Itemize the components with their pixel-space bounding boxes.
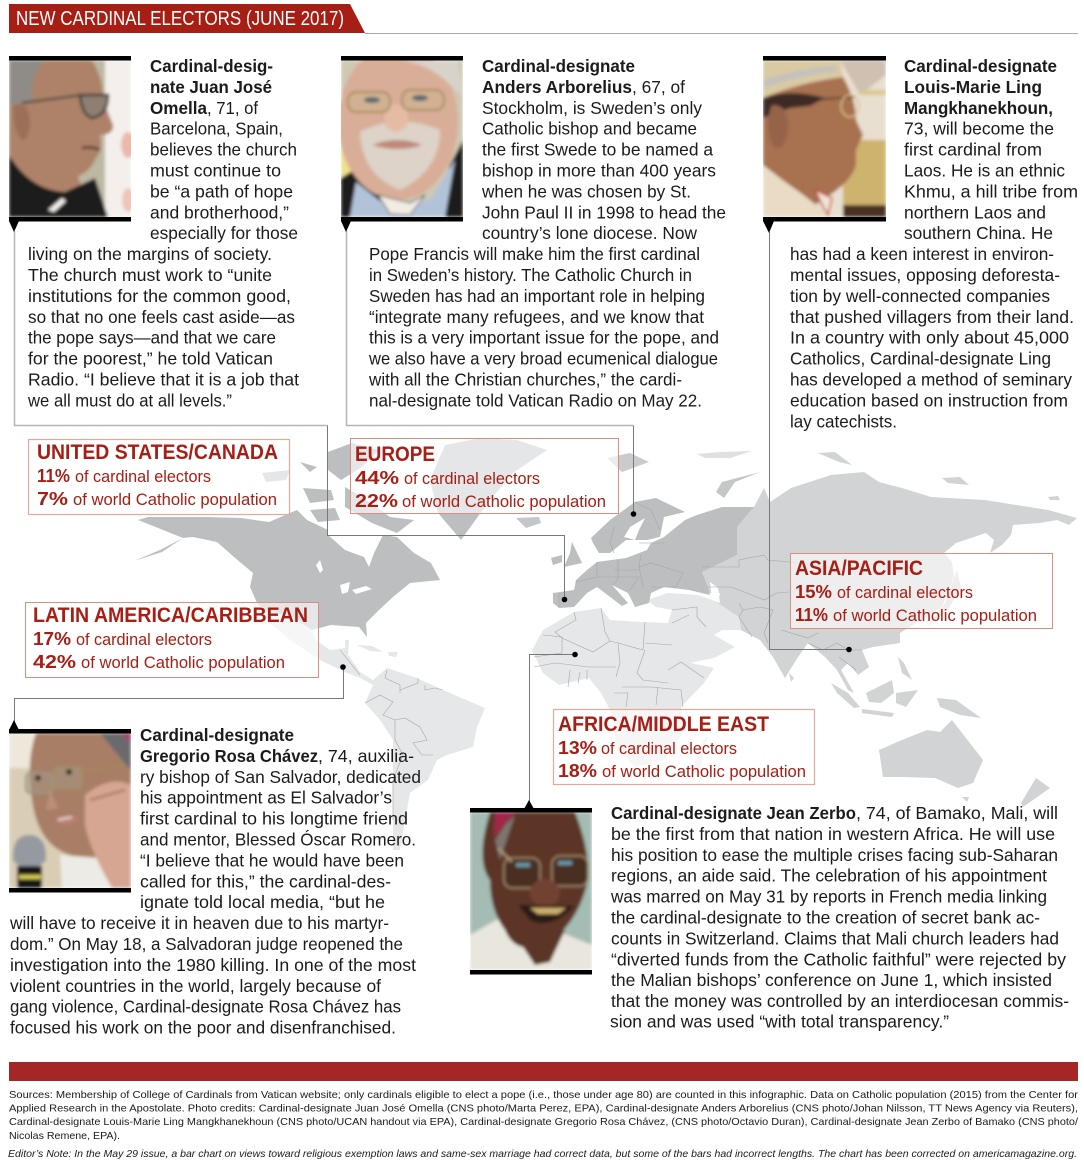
text block: Gregorio Rosa Chavez: focused his work on the poor and disenfranchised. (10, 1018, 396, 1038)
callout: Asia/Pacific: of world Catholic population (833, 606, 1037, 625)
text block: Louis-Marie Ling Mangkhanekhoun: mental issues, opposing deforesta- (790, 265, 1060, 285)
text block: Gregorio Rosa Chavez: first cardinal to his longtime friend (140, 809, 408, 829)
leader line: Rosa Chavez to El Salvador (14, 664, 346, 722)
callout: Africa/Middle East (554, 710, 814, 784)
text block: Juan Jose Omella: especially for those (150, 223, 298, 243)
callout: Asia/Pacific: of cardinal electors (837, 583, 973, 602)
callout: Africa/Middle East: of cardinal electors (601, 739, 737, 758)
sources and photo credits: Applied Research in the Apostolate. Photo credits: Cardinal-designate Juan José Omella (CNS photo/Marta Perez, EPA), Cardinal-designate Anders Arborelius (CNS photo/Johan Nilsson, TT News Agency via Reuters), (9, 1102, 1078, 1114)
text block: Juan Jose Omella: Cardinal-desig- (150, 56, 273, 76)
callout: United States/Canada: 11% (37, 466, 70, 486)
photo: Jean Zerbo (470, 800, 592, 974)
text block: Jean Zerbo: regions, an aide said. The celebration of his appointment (611, 866, 1047, 886)
callout: Africa/Middle East: 18% (558, 761, 597, 781)
pointer (9, 720, 19, 730)
text block: Anders Arborelius: “integrate many refugees, and we know that (369, 307, 704, 327)
text block: Jean Zerbo: counts in Switzerland. Claims that Mali church leaders had (611, 928, 1059, 948)
text block: Jean Zerbo (610, 803, 1069, 1032)
text block: Anders Arborelius: Anders Arborelius (482, 77, 632, 97)
text block: Juan Jose Omella: The church must work to “unite (28, 265, 272, 285)
text block: Louis-Marie Ling Mangkhanekhoun: first cardinal from (904, 140, 1042, 160)
text block: Gregorio Rosa Chavez: and mentor, Blessed Óscar Romero. (140, 828, 416, 850)
text block: Louis-Marie Ling Mangkhanekhoun: has developed a method of seminary (790, 370, 1072, 390)
Europe (551, 453, 754, 608)
text block: Louis-Marie Ling Mangkhanekhoun: has had a keen interest in environ- (790, 244, 1054, 264)
Iceland (516, 517, 541, 528)
text block: Louis-Marie Ling Mangkhanekhoun: Laos. He is an ethnic (904, 160, 1065, 180)
text block: Juan Jose Omella: so that no one feels cast aside—as (28, 307, 295, 327)
text block: Juan Jose Omella: believes the church (150, 140, 297, 160)
text block: Anders Arborelius: nal-designate told Vatican Radio on May 22. (369, 390, 702, 410)
text block: Jean Zerbo: Cardinal-designate Jean Zerbo (611, 803, 856, 823)
callout: Asia/Pacific (790, 554, 1052, 628)
Asia Pacific (697, 451, 1077, 807)
callout: United States/Canada: of world Catholic population (73, 490, 277, 509)
text block: Jean Zerbo: , 74, of Bamako, Mali, will (856, 803, 1058, 823)
callout: Latin America/Caribbean: LATIN AMERICA/CARIBBEAN (33, 604, 308, 627)
text block: Jean Zerbo: his position to ease the multiple crises facing sub-Saharan (611, 845, 1058, 865)
text block: Anders Arborelius: the first Swede to be named a (482, 140, 713, 160)
text block: Gregorio Rosa Chavez: investigation into the 1980 killing. In one of the most (10, 955, 416, 975)
text block: Jean Zerbo: “diverted funds from the Catholic faithful” were rejected by (611, 949, 1066, 969)
text block: Anders Arborelius: Sweden has had an important role in helping (369, 286, 705, 306)
callout: Latin America/Caribbean (26, 602, 318, 678)
callout: Europe: of world Catholic population (402, 492, 606, 511)
text block: Gregorio Rosa Chavez: Gregorio Rosa Chávez (140, 746, 318, 766)
text block: Gregorio Rosa Chavez: ry bishop of San Salvador, dedicated (140, 767, 421, 787)
callout: United States/Canada: UNITED STATES/CANADA (37, 441, 278, 464)
text block: Juan Jose Omella: nate Juan José (150, 77, 272, 97)
text block: Juan Jose Omella: the pope says—and that we care (28, 328, 276, 348)
leader line: Omella to Spain (14, 231, 567, 602)
sources and photo credits (9, 1089, 1079, 1142)
callout: Asia/Pacific: ASIA/PACIFIC (795, 557, 923, 580)
sources and photo credits: Sources: Membership of College of Cardinals from Vatican website; only cardinals eligible to elect a pope (i.e., those under age 80) are counted in this infographic. Data on Catholic population (2015) from the Center for (9, 1089, 1079, 1101)
text block: Louis-Marie Ling Mangkhanekhoun: lay catechists. (790, 411, 897, 431)
text block: Gregorio Rosa Chavez: his appointment as El Salvador’s (140, 788, 392, 808)
leader line: Ling to Laos (770, 232, 852, 652)
text block: Anders Arborelius: we also have a very broad ecumenical dialogue (368, 349, 718, 369)
text block: Anders Arborelius: Cardinal-designate (482, 56, 635, 76)
text block: Juan Jose Omella: we all must do at all levels.” (27, 390, 232, 410)
text block: Anders Arborelius: bishop in more than 400 years (482, 160, 716, 180)
text block: Jean Zerbo: sion and was used “with total transparency.” (610, 1012, 949, 1032)
text block: Louis-Marie Ling Mangkhanekhoun: Catholics, Cardinal-designate Ling (790, 349, 1051, 369)
callout: Africa/Middle East: of world Catholic population (602, 762, 806, 781)
text block: Louis-Marie Ling Mangkhanekhoun: Khmu, a hill tribe from (904, 181, 1078, 201)
text block: Juan Jose Omella (27, 56, 299, 410)
pointer (763, 221, 774, 233)
callout: Asia/Pacific: 15% (795, 582, 832, 602)
text block: Louis-Marie Ling Mangkhanekhoun: northern Laos and (904, 202, 1046, 222)
text block: Anders Arborelius: Catholic bishop and became (482, 119, 697, 139)
text block: Gregorio Rosa Chavez: “I believe that he would have been (140, 850, 404, 870)
text block: Anders Arborelius: with all the Christian churches,” the cardi- (368, 370, 682, 390)
callout: Europe: of cardinal electors (404, 469, 540, 488)
Latin America (257, 603, 485, 850)
text block: Juan Jose Omella: , 71, of (207, 98, 258, 118)
text block: Louis-Marie Ling Mangkhanekhoun: In a country with only about 45,000 (790, 328, 1069, 348)
photo: Juan Jose Omella (9, 56, 135, 232)
text block: Juan Jose Omella: Radio. “I believe that it is a job that (28, 370, 299, 390)
text block: Louis-Marie Ling Mangkhanekhoun: 73, will become the (904, 119, 1054, 139)
lakes (316, 560, 372, 594)
callout: Europe: 22% (355, 491, 398, 511)
callout: Latin America/Caribbean: 42% (33, 652, 76, 672)
text block: Juan Jose Omella: Barcelona, Spain, (150, 119, 283, 139)
text block: Jean Zerbo: the cardinal-designate to the creation of secret bank ac- (611, 908, 1040, 928)
text block: Gregorio Rosa Chavez: will have to receive it in heaven due to his martyr- (9, 913, 389, 933)
callout: Latin America/Caribbean: 17% (33, 629, 71, 649)
callout: Europe: EUROPE (355, 443, 435, 466)
text block: Juan Jose Omella: be “a path of hope (150, 181, 293, 201)
callout: Europe (350, 438, 618, 514)
text block: Anders Arborelius: Pope Francis will make him the first cardinal (369, 244, 700, 264)
text block: Anders Arborelius: , 67, of (632, 77, 685, 97)
Africa and Middle East (532, 593, 741, 772)
callout: Europe: 44% (355, 468, 399, 488)
text block: Jean Zerbo: was marred on May 31 by reports in French media linking (610, 887, 1047, 907)
leader line: Arborelius to Sweden (346, 231, 636, 517)
callout: United States/Canada: 7% (37, 489, 68, 509)
text block: Louis-Marie Ling Mangkhanekhoun: Mangkhanekhoun, (904, 98, 1053, 118)
text block: Louis-Marie Ling Mangkhanekhoun: Louis-Marie Ling (904, 77, 1042, 97)
text block: Juan Jose Omella: institutions for the common good, (28, 286, 291, 306)
world map (134, 438, 1077, 850)
text block: Juan Jose Omella: living on the margins of society. (28, 244, 272, 264)
callout: Latin America/Caribbean: of world Catholic population (81, 653, 285, 672)
callout: Africa/Middle East: AFRICA/MIDDLE EAST (558, 713, 769, 736)
text block: Louis-Marie Ling Mangkhanekhoun: that pushed villagers from their land. (790, 307, 1074, 327)
pointer (524, 800, 534, 809)
sources and photo credits: Nicolas Remene, EPA). (9, 1130, 120, 1142)
editor's note: Editor’s Note: In the May 29 issue, a bar chart on views toward religious exemption laws and same-sex marriage had correct data, but some of the bars had incorrect lengths. The chart has been corrected on americamagazine.org. (8, 1148, 1077, 1160)
text block: Anders Arborelius: Stockholm, is Sweden’s only (482, 98, 702, 118)
sources and photo credits: Cardinal-designate Louis-Marie Ling Mangkhanekhoun (CNS photo/UCAN handout via EPA), Cardinal-designate Gregorio Rosa Chávez, (CNS photo/Octavio Duran), Cardinal-designate Jean Zerbo of Bamako (CNS photo/ (9, 1116, 1078, 1128)
text block: Louis-Marie Ling Mangkhanekhoun: tion by well-connected companies (790, 286, 1050, 306)
text block: Jean Zerbo: the Malian bishops’ conference on June 1, which insisted (611, 970, 1052, 990)
text block: Anders Arborelius: in Sweden’s history. The Catholic Church in (369, 265, 692, 285)
text block: Anders Arborelius (368, 56, 726, 410)
text block: Juan Jose Omella: must continue to (150, 160, 281, 180)
text block: Gregorio Rosa Chavez: ignate told local media, “but he (140, 892, 385, 912)
text block: Gregorio Rosa Chavez: , 74, auxilia- (318, 746, 414, 766)
text block: Louis-Marie Ling Mangkhanekhoun: Cardinal-designate (904, 56, 1057, 76)
footer bar (9, 1062, 1078, 1081)
text block: Louis-Marie Ling Mangkhanekhoun: education based on instruction from (790, 390, 1068, 410)
text block: Louis-Marie Ling Mangkhanekhoun (790, 56, 1078, 431)
text block: Gregorio Rosa Chavez: gang violence, Cardinal-designate Rosa Chávez has (10, 997, 401, 1017)
country borders (340, 502, 880, 820)
pointer (9, 221, 19, 232)
text block: Juan Jose Omella: for the poorest,” he told Vatican (28, 349, 273, 369)
callout: Latin America/Caribbean: of cardinal electors (76, 630, 212, 649)
leader line: Zerbo to Mali (530, 652, 578, 802)
text block: Anders Arborelius: John Paul II in 1998 to head the (482, 202, 726, 222)
text block: Gregorio Rosa Chavez: violent countries in the world, largely because of (10, 976, 381, 996)
text block: Gregorio Rosa Chavez (9, 725, 421, 1038)
photo: Louis-Marie Ling Mangkhanekhoun (763, 56, 886, 233)
text block: Juan Jose Omella: and brotherhood,” (150, 202, 289, 222)
text block: Louis-Marie Ling Mangkhanekhoun: southern China. He (904, 223, 1053, 243)
North America (134, 443, 440, 637)
photo: Gregorio Rosa Chavez (9, 720, 131, 892)
callout: Asia/Pacific: 11% (795, 605, 828, 625)
text block: Jean Zerbo: be the first from that nation in western Africa. He will use (611, 824, 1055, 844)
callout: Africa/Middle East: 13% (558, 738, 597, 758)
photo: Anders Arborelius (338, 44, 463, 232)
text block: Gregorio Rosa Chavez: dom.” On May 18, a Salvadoran judge reopened the (10, 934, 403, 954)
text block: Juan Jose Omella: Omella (150, 98, 207, 118)
text block: Anders Arborelius: when he was chosen by St. (481, 181, 691, 201)
title banner (9, 4, 1078, 34)
Greenland (430, 438, 547, 540)
callout: United States/Canada: of cardinal electors (75, 467, 211, 486)
text block: Jean Zerbo: that the money was controlled by an interdiocesan commis- (611, 991, 1069, 1011)
text block: Anders Arborelius: country’s lone diocese. Now (482, 223, 697, 243)
pointer (341, 221, 351, 232)
text block: Gregorio Rosa Chavez: Cardinal-designate (140, 725, 294, 745)
title banner: NEW CARDINAL ELECTORS (JUNE 2017) (16, 8, 344, 30)
text block: Anders Arborelius: this is a very important issue for the pope, and (369, 328, 719, 348)
text block: Gregorio Rosa Chavez: called for this,” the cardinal-des- (140, 871, 391, 891)
callout: United States/Canada (28, 440, 290, 514)
